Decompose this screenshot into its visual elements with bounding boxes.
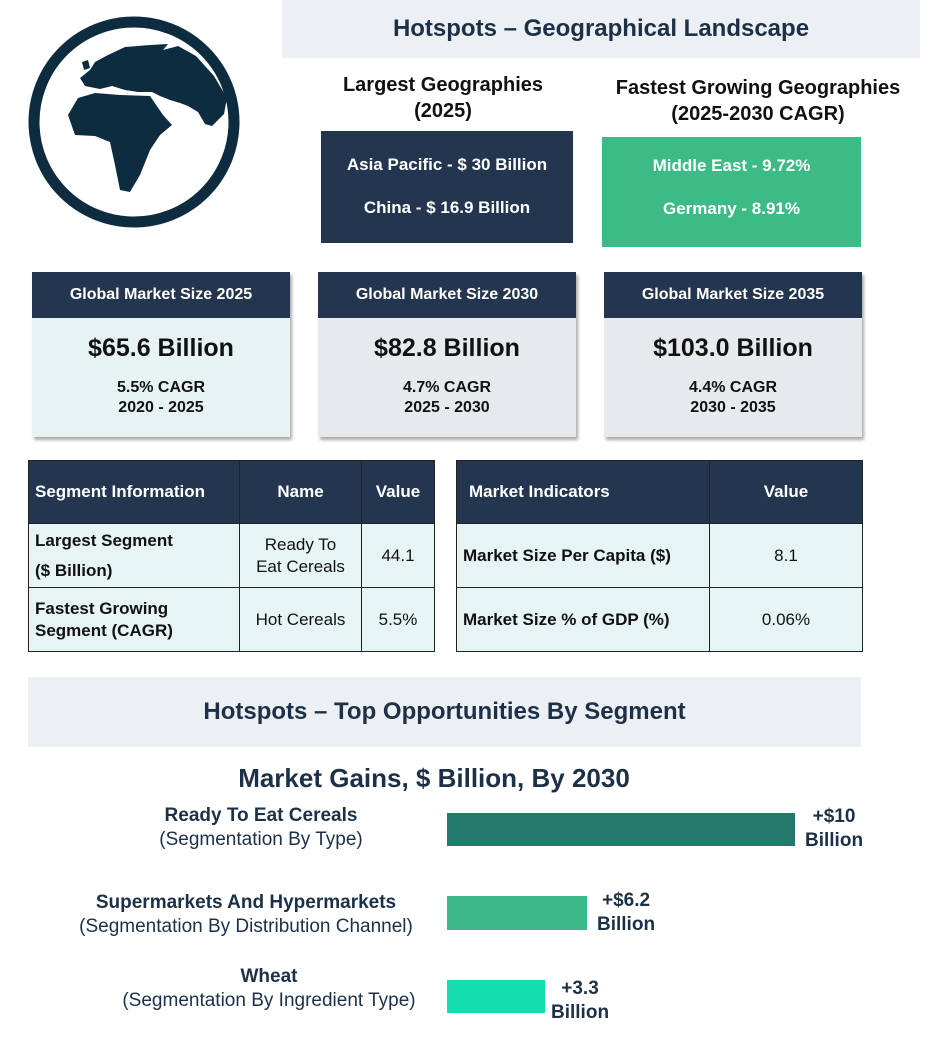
bar: ready to eat [447,813,795,846]
table: segment information [28,460,435,652]
card: market size 2025: 2020 - 2025 [118,399,204,416]
chart title: Market Gains, $ Billion, By 2030 [238,763,630,793]
heading: fastest growing [616,77,900,125]
value: +3.3: Billion [551,1002,609,1023]
card: market size 2030: Global Market Size 2030 [356,286,538,303]
label: ready to eat: Ready To Eat Cereals [165,805,357,826]
card: market size 2035: 4.4% CAGR [689,379,777,396]
card: market size 2025: Global Market Size 2025 [70,286,252,303]
table: segment information: 5.5% [379,610,417,628]
table: segment information: Largest Segment [35,530,173,550]
table: segment information: 44.1 [381,546,415,564]
card: market size 2035 [604,272,862,437]
label: wheat: (Segmentation By Ingredient Type) [122,990,416,1011]
table: segment information: Segment (CAGR) [35,620,173,640]
title banner [282,0,920,58]
value: +$6.2: Billion [597,914,655,935]
table: segment information: Name [277,482,324,501]
banner: top opportunities [28,677,861,747]
card: market size 2030: 2025 - 2030 [404,399,490,416]
heading: fastest growing: (2025-2030 CAGR) [671,103,845,125]
label: supermarkets [79,892,413,937]
value: +$10 [805,806,863,851]
table: market indicators [456,460,863,652]
label: ready to eat [159,805,363,850]
label: supermarkets: Supermarkets And Hypermarkets [96,892,396,913]
table: market indicators: Value [764,482,808,501]
card: market size 2035: $103.0 Billion [653,334,813,362]
value: +$10: +$10 [813,806,855,827]
bar: wheat [447,980,545,1013]
card: market size 2035: 2030 - 2035 [690,399,776,416]
table: segment information: Hot Cereals [256,610,345,628]
bar: supermarkets [447,896,587,930]
card: market size 2035: Global Market Size 2035 [642,286,824,303]
card: market size 2030: $82.8 Billion [374,334,520,362]
icon: globe [28,16,240,228]
table: segment information: Segment Information [35,482,205,501]
table: segment information: Fastest Growing [35,598,168,618]
table: segment information: Ready To [265,534,336,554]
title banner: Hotspots – Geographical Landscape [393,15,809,42]
table: market indicators: 8.1 [774,546,798,564]
table: market indicators: Market Indicators [469,482,610,501]
panel: fastest growing: Middle East - 9.72% [653,156,810,175]
value: +3.3 [551,978,609,1023]
table: market indicators: Market Size % of GDP (%) [463,610,670,628]
table: segment information: ($ Billion) [35,560,112,580]
value: +$6.2 [597,890,655,935]
card: market size 2025: $65.6 Billion [88,334,234,362]
heading: largest geographies: (2025) [414,100,472,122]
table: market indicators: Market Size Per Capita ($) [463,546,671,564]
value: +$10: Billion [805,830,863,851]
card: market size 2030 [318,272,576,437]
table: market indicators: 0.06% [762,610,810,628]
label: wheat [122,966,416,1011]
card: market size 2030: 4.7% CAGR [403,379,491,396]
label: ready to eat: (Segmentation By Type) [159,829,363,850]
panel: fastest growing [602,137,861,247]
value: +3.3: +3.3 [561,978,599,999]
panel: largest geographies [321,131,573,243]
heading: largest geographies: Largest Geographies [343,74,543,96]
banner: top opportunities: Hotspots – Top Opportunities By Segment [203,698,686,725]
panel: fastest growing: Germany - 8.91% [663,199,800,218]
label: wheat: Wheat [240,966,298,987]
table: segment information: Eat Cereals [256,556,345,576]
value: +$6.2: +$6.2 [602,890,650,911]
heading: fastest growing: Fastest Growing Geographies [616,77,900,99]
label: supermarkets: (Segmentation By Distribution Channel) [79,916,413,937]
panel: largest geographies: Asia Pacific - $ 30 Billion [347,155,547,174]
heading: largest geographies [343,74,543,122]
card: market size 2025: 5.5% CAGR [117,379,205,396]
card: market size 2025 [32,272,290,437]
bar chart [79,805,863,1023]
panel: largest geographies: China - $ 16.9 Billion [364,198,530,217]
table: segment information: Value [376,482,420,501]
